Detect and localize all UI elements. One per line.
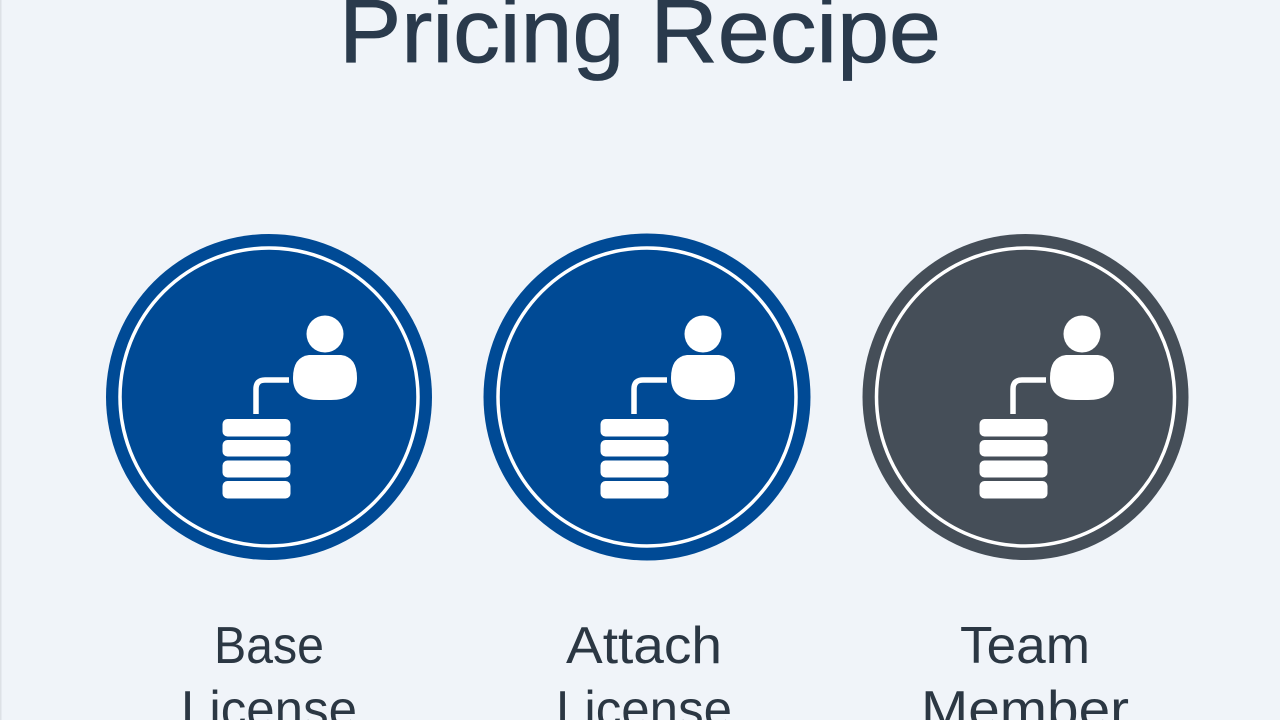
icon: user linked to database [980,316,1114,498]
attach license label: Attach [566,617,722,675]
icon: user linked to database [600,316,735,498]
panel: team member [862,234,1188,720]
base license label: Base [214,617,324,675]
team member circle [862,234,1188,560]
icon: user linked to database [222,316,357,498]
panel: base license [106,234,432,720]
attach license circle [484,234,810,560]
base license ring [120,248,418,546]
attach license ring [498,248,796,546]
team member label: Team [960,617,1090,675]
panel: attach license [484,234,810,720]
page edge [0,0,2,720]
base license circle [106,234,432,560]
team member ring [876,248,1174,546]
